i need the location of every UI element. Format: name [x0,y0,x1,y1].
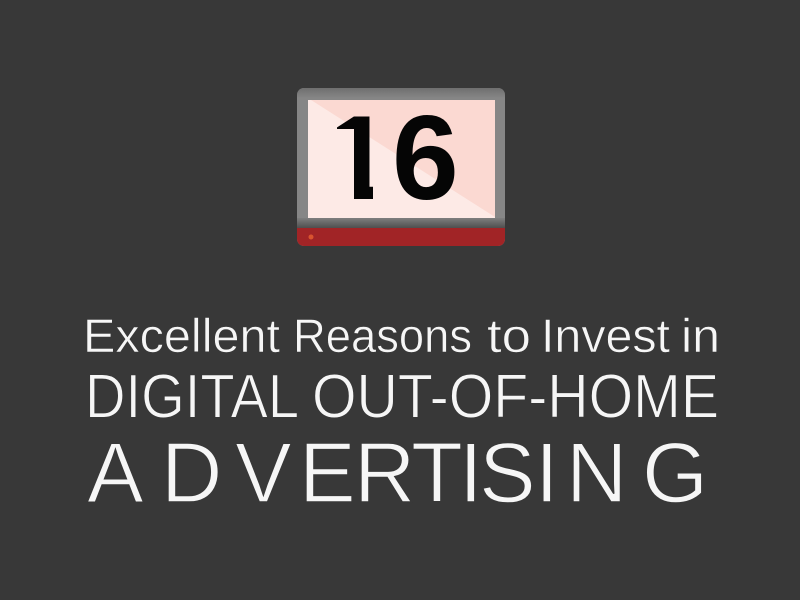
title line 1: Reasons [293,309,472,362]
title line 1: Excellent [83,309,280,362]
title line 1: Invest [541,309,670,362]
red base bar [297,228,505,246]
title line 3: ADVERTISING [87,426,708,521]
title [83,309,720,521]
indicator light [308,234,314,240]
title line 1: in [681,309,720,362]
screen bezel [297,88,505,246]
title line 2: DIGITAL [85,362,298,432]
icon: digital screen [297,88,505,246]
screen panel [308,100,495,218]
title line 2: OUT-OF-HOME [312,362,719,432]
title line 1: to [487,309,531,362]
number 16: 16 [325,91,459,225]
